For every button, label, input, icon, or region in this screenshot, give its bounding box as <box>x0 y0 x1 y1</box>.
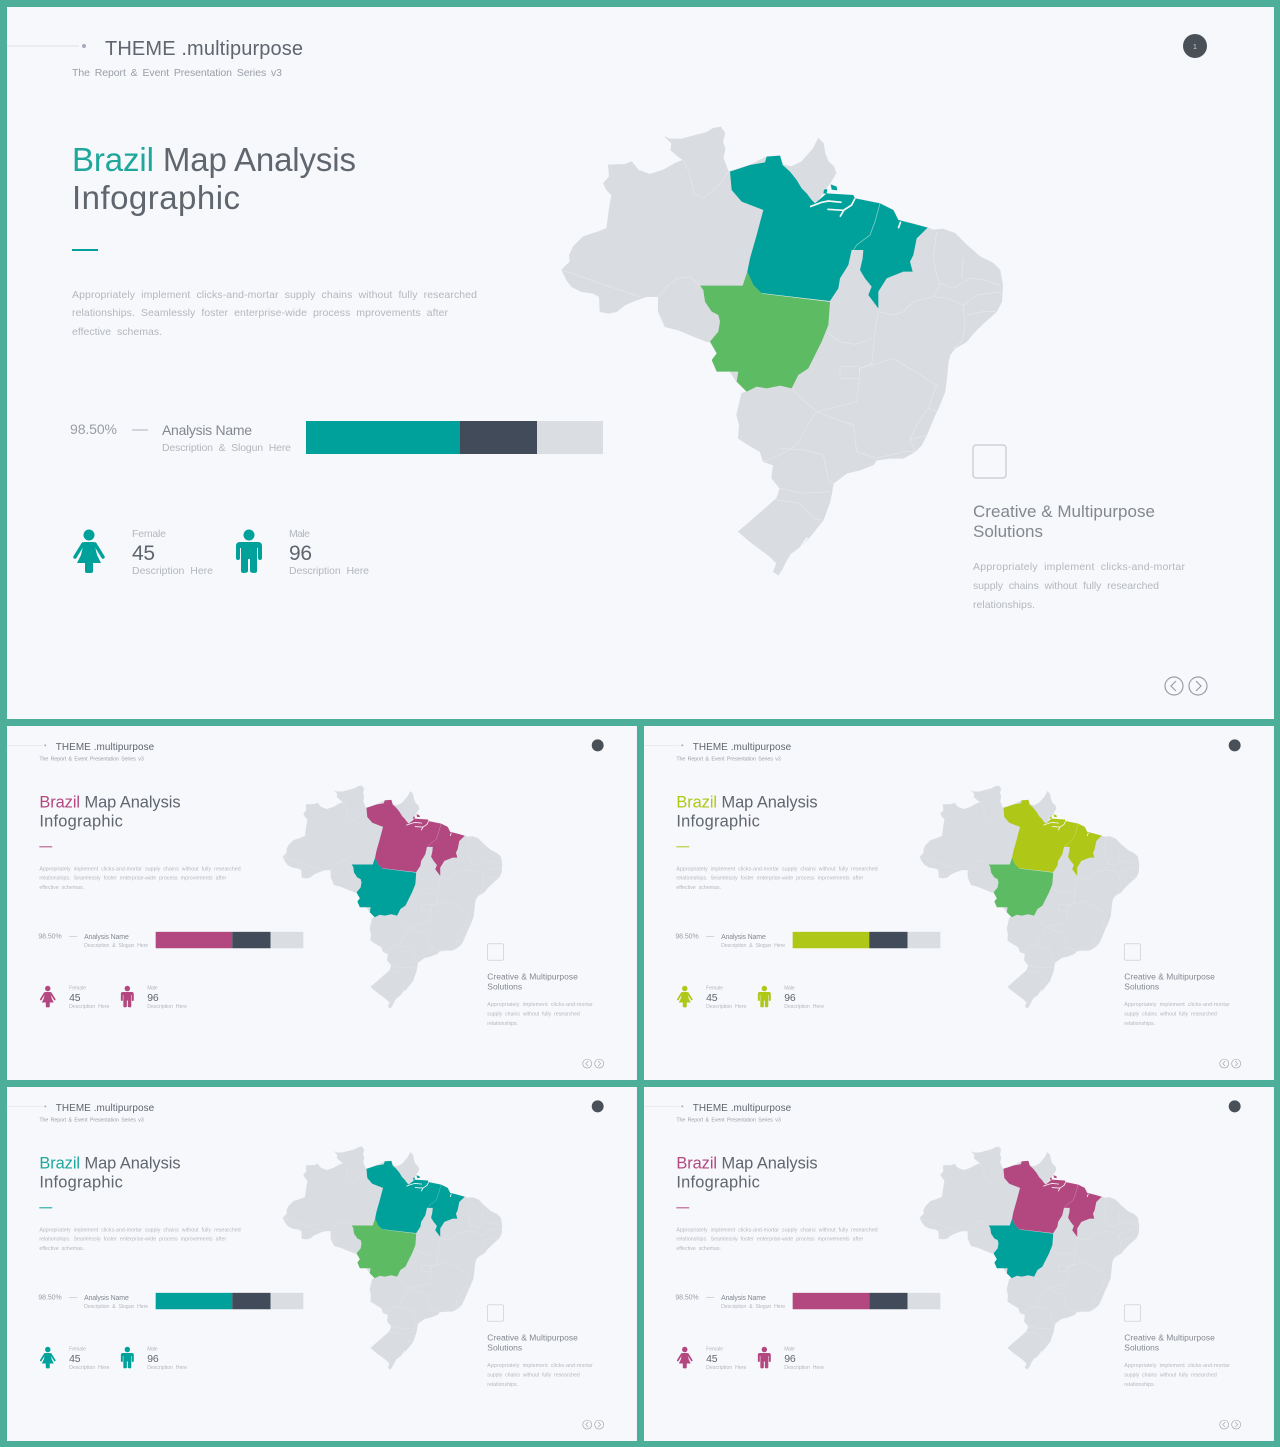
main heading: Infographic <box>39 812 123 830</box>
callout heading <box>1124 1333 1215 1353</box>
analysis stat: Analysis Name <box>162 422 252 438</box>
accent rule <box>676 845 689 848</box>
stacked bar <box>793 932 940 948</box>
main heading <box>676 1155 818 1191</box>
icon: female <box>678 986 692 1007</box>
stacked bar <box>156 1293 303 1309</box>
female stat: 45 <box>69 1354 81 1365</box>
analysis stat <box>70 421 291 454</box>
analysis stat <box>675 933 785 949</box>
panel: small slide, teal and green <box>7 1087 637 1441</box>
male stat: Male <box>147 1347 158 1353</box>
callout heading: Creative & Multipurpose <box>1124 1333 1215 1343</box>
Brazil map <box>283 786 502 1008</box>
description paragraph: relationships. Seamlessly foster enterprise-wide process mprovements after <box>676 1237 864 1243</box>
analysis stat: Analysis Name <box>721 1295 766 1302</box>
female stat: Description Here <box>132 565 213 577</box>
male stat: Description Here <box>784 1004 824 1010</box>
male stat: 96 <box>784 993 796 1004</box>
nav arrows <box>1220 1059 1241 1068</box>
description paragraph: effective schemas. <box>676 885 721 891</box>
callout heading: Creative & Multipurpose <box>1124 972 1215 982</box>
male stat: Male <box>147 986 158 992</box>
icon: male <box>121 1347 134 1368</box>
male stat <box>784 1347 824 1371</box>
analysis stat: 98.50% <box>38 933 62 940</box>
female stat: 45 <box>706 993 718 1004</box>
icon: male <box>758 1347 771 1368</box>
female stat <box>69 986 110 1010</box>
description paragraph <box>39 867 241 891</box>
icon placeholder <box>1124 1305 1141 1321</box>
male stat <box>784 986 824 1010</box>
page number badge <box>592 1100 604 1112</box>
icon placeholder <box>973 445 1006 478</box>
callout heading: Creative & Multipurpose <box>973 502 1155 521</box>
analysis stat: Description & Slogun Here <box>721 943 785 949</box>
callout text: relationships. <box>487 1382 518 1388</box>
Brazil map <box>283 1147 502 1369</box>
male stat <box>147 1347 187 1371</box>
description paragraph: relationships. Seamlessly foster enterprise-wide process mprovements after <box>39 1237 227 1243</box>
male stat <box>147 986 187 1010</box>
header title: THEME .multipurpose <box>105 38 303 60</box>
callout heading: Solutions <box>973 522 1043 541</box>
nav arrows <box>583 1059 604 1068</box>
description paragraph: Appropriately implement clicks-and-mortar supply chains without fully researched <box>72 289 477 301</box>
icon: male <box>758 986 771 1007</box>
description paragraph: effective schemas. <box>72 326 162 338</box>
callout heading <box>487 972 578 992</box>
callout heading: Creative & Multipurpose <box>487 972 578 982</box>
male stat: Description Here <box>147 1365 187 1371</box>
main heading <box>39 1155 181 1191</box>
stacked bar <box>306 421 603 454</box>
icon: female <box>41 1347 55 1368</box>
female stat: Female <box>132 528 166 540</box>
description paragraph <box>676 1228 878 1252</box>
header title: THEME .multipurpose <box>693 742 792 753</box>
nav arrows <box>1220 1420 1241 1429</box>
description paragraph: effective schemas. <box>676 1246 721 1252</box>
callout text: relationships. <box>1124 1021 1155 1027</box>
analysis stat: 98.50% <box>675 1294 699 1301</box>
page number badge <box>1229 739 1241 751</box>
panel: small slide, magenta and teal <box>7 726 637 1080</box>
callout text: Appropriately implement clicks-and-mortar <box>1124 1363 1230 1369</box>
main heading: Brazil Map Analysis <box>676 794 818 812</box>
main heading: Brazil Map Analysis <box>39 1155 181 1173</box>
accent rule <box>39 1206 52 1209</box>
callout text: supply chains without fully researched <box>973 580 1159 592</box>
header subtitle: The Report & Event Presentation Series v3 <box>39 756 144 762</box>
male stat <box>289 528 369 577</box>
icon: female <box>41 986 55 1007</box>
callout text: supply chains without fully researched <box>487 1011 580 1017</box>
page number badge <box>1183 34 1207 58</box>
callout text: relationships. <box>973 599 1035 611</box>
description paragraph <box>676 867 878 891</box>
callout heading <box>973 502 1155 541</box>
callout text: supply chains without fully researched <box>1124 1372 1217 1378</box>
female stat: Female <box>69 986 86 992</box>
header title: THEME .multipurpose <box>693 1103 792 1114</box>
header subtitle: The Report & Event Presentation Series v3 <box>676 1117 781 1123</box>
main heading: Brazil Map Analysis <box>39 794 181 812</box>
panel: small slide, magenta and teal, lower right <box>644 1087 1274 1441</box>
main heading: Brazil Map Analysis <box>72 141 356 178</box>
icon placeholder <box>487 944 504 960</box>
Brazil map <box>920 786 1139 1008</box>
Brazil map <box>562 127 1003 575</box>
panel: small slide, lime and green <box>644 726 1274 1080</box>
female stat: Description Here <box>69 1004 110 1010</box>
female stat: 45 <box>706 1354 718 1365</box>
male stat: Description Here <box>784 1365 824 1371</box>
callout text: supply chains without fully researched <box>487 1372 580 1378</box>
accent rule <box>72 249 98 251</box>
female stat <box>706 1347 747 1371</box>
callout heading: Creative & Multipurpose <box>487 1333 578 1343</box>
female stat <box>132 528 213 577</box>
analysis stat: Analysis Name <box>84 934 129 941</box>
analysis stat: Analysis Name <box>721 934 766 941</box>
description paragraph <box>39 1228 241 1252</box>
accent rule <box>39 845 52 848</box>
icon: male <box>121 986 134 1007</box>
main heading: Infographic <box>39 1173 123 1191</box>
page number badge: 1 <box>1193 44 1197 51</box>
callout text <box>1124 1363 1230 1388</box>
header subtitle: The Report & Event Presentation Series v3 <box>39 1117 144 1123</box>
callout heading: Solutions <box>1124 1343 1159 1353</box>
male stat: 96 <box>147 1354 159 1365</box>
callout text <box>1124 1002 1230 1027</box>
description paragraph: Appropriately implement clicks-and-mortar supply chains without fully researched <box>676 1228 878 1234</box>
female stat: Female <box>69 1347 86 1353</box>
header title: THEME .multipurpose <box>56 1103 155 1114</box>
panel: main slide, teal and green <box>7 7 1274 719</box>
analysis stat <box>38 933 148 949</box>
male stat: Male <box>289 528 310 540</box>
main heading <box>39 794 181 830</box>
analysis stat: Description & Slogun Here <box>721 1304 785 1310</box>
analysis stat: Description & Slogun Here <box>84 943 148 949</box>
callout heading: Solutions <box>487 1343 522 1353</box>
callout text: Appropriately implement clicks-and-mortar <box>487 1002 593 1008</box>
callout text: supply chains without fully researched <box>1124 1011 1217 1017</box>
page number badge <box>592 739 604 751</box>
description paragraph: effective schemas. <box>39 885 84 891</box>
description paragraph: relationships. Seamlessly foster enterprise-wide process mprovements after <box>676 876 864 882</box>
callout text <box>487 1363 593 1388</box>
male stat: 96 <box>289 542 312 565</box>
icon: male <box>236 530 262 573</box>
male stat: 96 <box>147 993 159 1004</box>
header subtitle: The Report & Event Presentation Series v3 <box>72 67 282 79</box>
analysis stat: 98.50% <box>675 933 699 940</box>
male stat: Description Here <box>289 565 369 577</box>
female stat: Description Here <box>706 1365 747 1371</box>
analysis stat <box>675 1294 785 1310</box>
callout text: relationships. <box>487 1021 518 1027</box>
analysis stat: 98.50% <box>70 421 117 437</box>
callout text: Appropriately implement clicks-and-mortar <box>973 561 1186 573</box>
female stat: 45 <box>132 542 155 565</box>
callout text: Appropriately implement clicks-and-mortar <box>1124 1002 1230 1008</box>
analysis stat: 98.50% <box>38 1294 62 1301</box>
nav arrows <box>583 1420 604 1429</box>
male stat: Male <box>784 986 795 992</box>
female stat: Female <box>706 1347 723 1353</box>
accent rule <box>676 1206 689 1209</box>
description paragraph: effective schemas. <box>39 1246 84 1252</box>
header subtitle: The Report & Event Presentation Series v3 <box>676 756 781 762</box>
callout text <box>487 1002 593 1027</box>
icon: female <box>678 1347 692 1368</box>
description paragraph: relationships. Seamlessly foster enterprise-wide process mprovements after <box>39 876 227 882</box>
callout heading <box>1124 972 1215 992</box>
description paragraph <box>72 289 477 338</box>
female stat: 45 <box>69 993 81 1004</box>
nav arrows <box>1165 677 1207 695</box>
description paragraph: Appropriately implement clicks-and-mortar supply chains without fully researched <box>39 867 241 873</box>
icon: female <box>75 530 103 573</box>
main heading: Infographic <box>676 812 760 830</box>
analysis stat: Description & Slogun Here <box>162 442 291 454</box>
stacked bar <box>156 932 303 948</box>
female stat <box>69 1347 110 1371</box>
main heading: Brazil Map Analysis <box>676 1155 818 1173</box>
description paragraph: Appropriately implement clicks-and-mortar supply chains without fully researched <box>39 1228 241 1234</box>
page number badge <box>1229 1100 1241 1112</box>
female stat: Description Here <box>706 1004 747 1010</box>
female stat <box>706 986 747 1010</box>
analysis stat <box>38 1294 148 1310</box>
female stat: Description Here <box>69 1365 110 1371</box>
icon placeholder <box>1124 944 1141 960</box>
male stat: Description Here <box>147 1004 187 1010</box>
male stat: Male <box>784 1347 795 1353</box>
callout heading <box>487 1333 578 1353</box>
callout text <box>973 561 1186 611</box>
male stat: 96 <box>784 1354 796 1365</box>
main heading: Infographic <box>72 179 240 216</box>
analysis stat: Description & Slogun Here <box>84 1304 148 1310</box>
Brazil map <box>920 1147 1139 1369</box>
icon placeholder <box>487 1305 504 1321</box>
stacked bar <box>793 1293 940 1309</box>
main heading: Infographic <box>676 1173 760 1191</box>
callout text: Appropriately implement clicks-and-mortar <box>487 1363 593 1369</box>
callout heading: Solutions <box>1124 982 1159 992</box>
callout text: relationships. <box>1124 1382 1155 1388</box>
analysis stat: Analysis Name <box>84 1295 129 1302</box>
description paragraph: Appropriately implement clicks-and-mortar supply chains without fully researched <box>676 867 878 873</box>
callout heading: Solutions <box>487 982 522 992</box>
female stat: Female <box>706 986 723 992</box>
main heading <box>72 141 356 216</box>
header title: THEME .multipurpose <box>56 742 155 753</box>
main heading <box>676 794 818 830</box>
description paragraph: relationships. Seamlessly foster enterprise-wide process mprovements after <box>72 307 448 319</box>
